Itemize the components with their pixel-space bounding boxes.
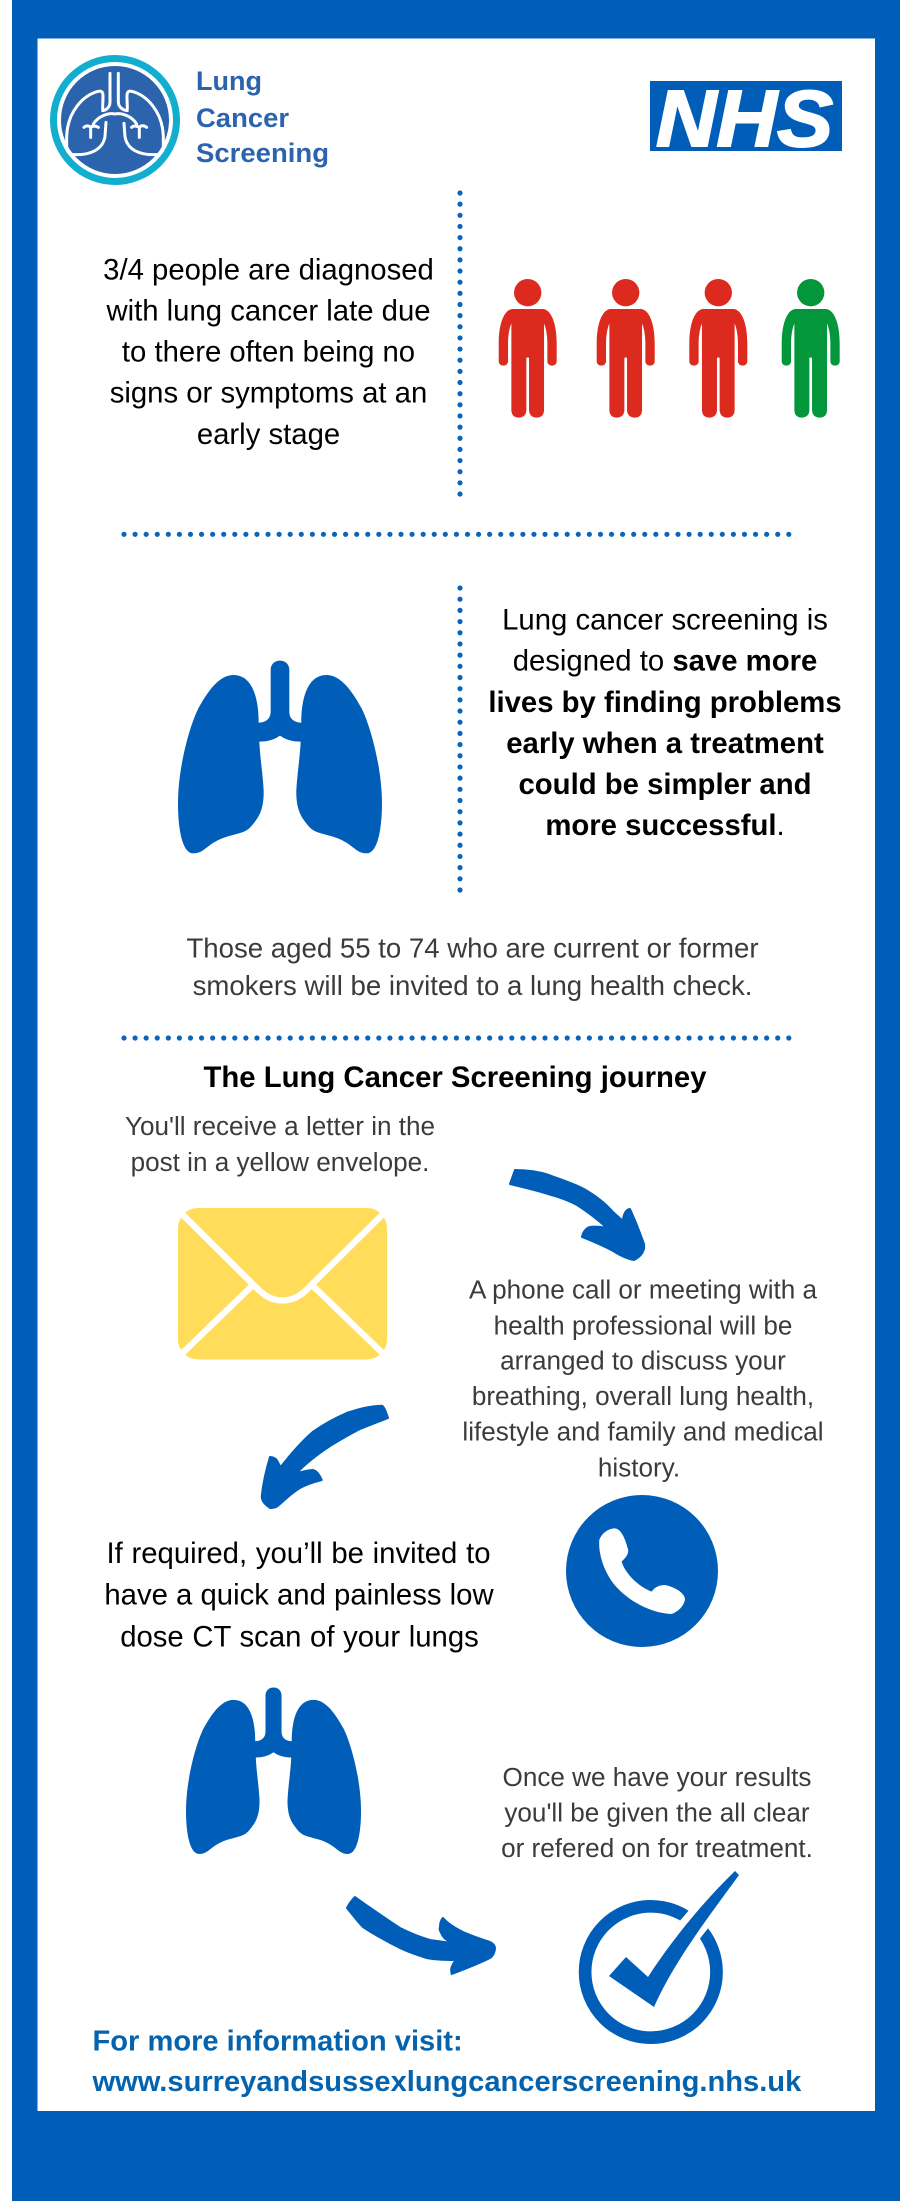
- icon row: people: [499, 279, 840, 418]
- step 1 text: letter: [125, 1111, 435, 1177]
- logo wordmark: Screening: [196, 138, 329, 168]
- NHS logo: NHS: [656, 74, 833, 163]
- step 4 text: results: [501, 1762, 813, 1863]
- text: eligibility: [186, 932, 759, 1001]
- step 2 text: phone call: [462, 1275, 824, 1482]
- heading: journey: The Lung Cancer Screening journey: [203, 1061, 707, 1094]
- logo: lung cancer screening: [54, 58, 329, 182]
- step 2 text: phone call: breathing, overall lung health,: [472, 1381, 814, 1411]
- icon: person red 3: [689, 279, 747, 418]
- text: purpose of screening: early when a treatment: [506, 727, 824, 760]
- text: purpose of screening: [488, 604, 842, 842]
- step 4 text: results: you'll be given the all clear: [504, 1798, 810, 1828]
- step 4 text: results: or refered on for treatment.: [501, 1833, 813, 1863]
- icon: logo roundel: [54, 58, 176, 182]
- icon: yellow envelope: [178, 1208, 387, 1360]
- footer: more information: www.surreyandsussexlungcancerscreening.nhs.uk: [92, 2066, 802, 2098]
- icon: person green: [782, 279, 840, 418]
- step 1 text: letter: You'll receive a letter in the: [125, 1111, 435, 1141]
- text: purpose of screening: could be simpler and: [518, 768, 812, 801]
- text: purpose of screening: Lung cancer screening is: [502, 604, 828, 637]
- arrow: phone call to scan: [262, 1406, 388, 1508]
- text: eligibility: Those aged 55 to 74 who are current or former: [186, 932, 759, 964]
- statistic text: 3/4 people: to there often being no: [122, 336, 415, 369]
- logo wordmark: Cancer: [196, 103, 290, 133]
- footer: more information: [92, 2026, 802, 2098]
- statistic text: 3/4 people: early stage: [197, 418, 340, 451]
- text: purpose of screening: lives by finding problems: [488, 686, 842, 719]
- icon: phone: [566, 1495, 718, 1647]
- icon: person red 2: [597, 279, 655, 418]
- step 3 text: CT scan: dose CT scan of your lungs: [120, 1620, 479, 1654]
- text: purpose of screening: designed to save more: [513, 645, 817, 678]
- arrow: scan to results: [347, 1897, 495, 1974]
- statistic text: 3/4 people: with lung cancer late due: [105, 295, 431, 328]
- icon: large lungs: [178, 661, 382, 853]
- step 3 text: CT scan: If required, you’ll be invited to: [106, 1537, 491, 1570]
- statistic text: 3/4 people: signs or symptoms at an: [110, 377, 427, 410]
- footer: more information: For more information visit:: [92, 2026, 463, 2058]
- icon: person red 1: [499, 279, 557, 418]
- icon: small lungs: [186, 1688, 361, 1854]
- step 3 text: CT scan: [104, 1537, 494, 1654]
- step 2 text: phone call: A phone call or meeting with a: [469, 1275, 818, 1305]
- text: eligibility: smokers will be invited to a lung health check.: [193, 970, 752, 1001]
- statistic text: 3/4 people: 3/4 people are diagnosed: [103, 253, 434, 286]
- step 2 text: phone call: lifestyle and family and medical: [462, 1417, 824, 1447]
- statistic text: 3/4 people: [103, 253, 434, 451]
- step 2 text: phone call: history.: [598, 1452, 680, 1482]
- text: purpose of screening: more successful.: [545, 809, 785, 842]
- icon: check mark in circle: [585, 1871, 739, 2038]
- step 1 text: letter: post in a yellow envelope.: [131, 1147, 429, 1177]
- step 4 text: results: Once we have your results: [503, 1762, 811, 1792]
- logo wordmark: [196, 66, 329, 168]
- step 2 text: phone call: arranged to discuss your: [500, 1346, 786, 1376]
- step 3 text: CT scan: have a quick and painless low: [104, 1578, 494, 1611]
- step 2 text: phone call: health professional will be: [494, 1310, 792, 1340]
- arrow: letter to phone call: [510, 1170, 644, 1260]
- logo wordmark: Lung: [196, 66, 262, 96]
